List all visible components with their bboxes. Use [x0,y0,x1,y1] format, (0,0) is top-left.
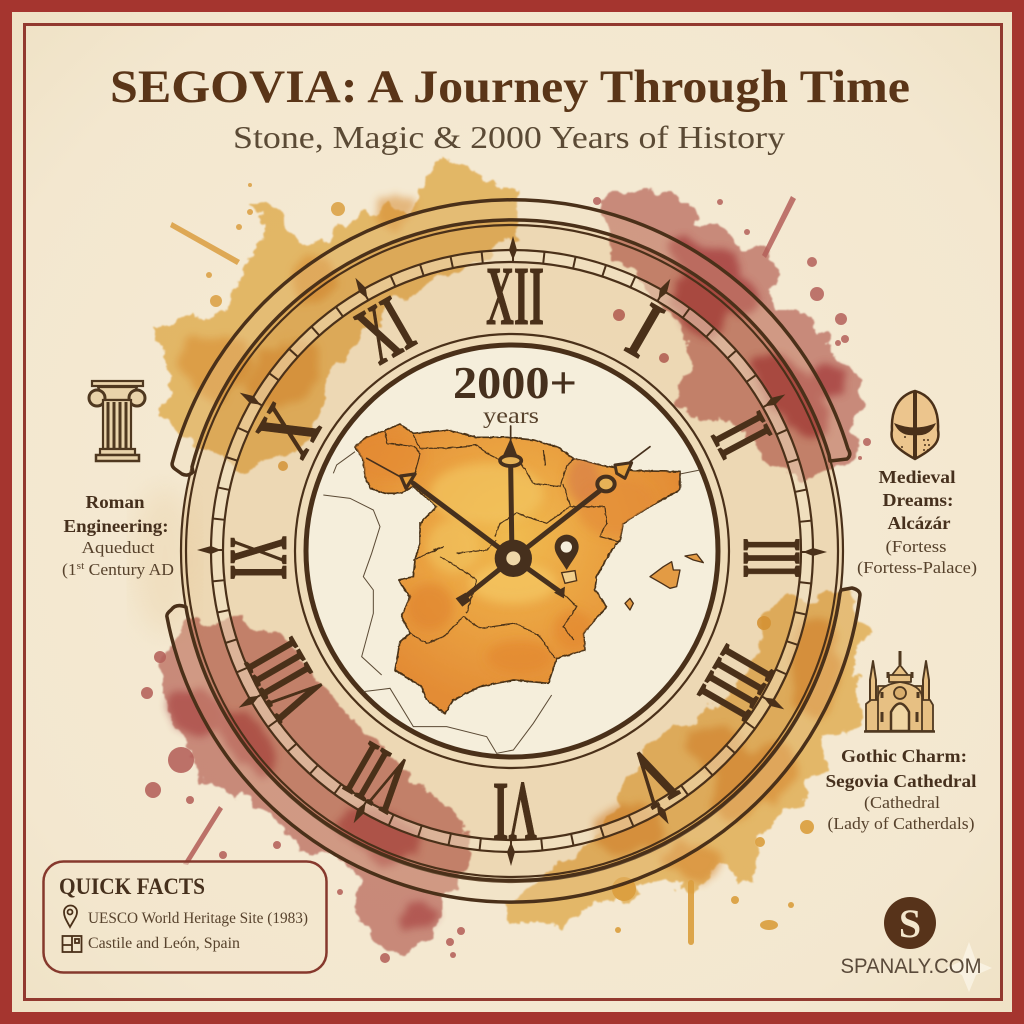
label: Roman Engineering: Engineering: [64,516,168,536]
label: Roman Engineering: st [77,560,84,572]
label: Gothic Charm: Gothic Charm: [841,746,967,766]
roman numerals: XII [486,250,544,343]
clock face [295,334,729,768]
title: SEGOVIA: A Journey Through Time [110,61,910,113]
label: Roman Engineering: Century AD [84,560,174,579]
logo: Spanaly: S [899,901,921,946]
minute track [211,250,813,852]
faint wash beside dial [133,485,197,635]
label: Medieval Dreams: Alcázár [888,513,951,533]
roman numerals: I [613,285,677,376]
label: Medieval Dreams [857,467,977,577]
label: Roman Engineering: Roman [86,492,144,512]
label: Roman Engineering: Aqueduct [82,538,155,557]
Balearic islands [625,554,703,610]
icon: gothic cathedral [864,651,935,732]
hour diamonds [197,236,827,866]
subtitle: Stone, Magic & 2000 Years of History [233,119,785,155]
quick facts heading: QUICK FACTS [59,874,205,899]
dial tinted ring [181,220,843,882]
roman numerals: VII [332,724,425,831]
Spain landmass [355,424,680,713]
S badge [884,897,936,949]
clock dial [167,200,860,902]
roman numerals: XI [342,279,428,382]
label: Gothic Charm: (Lady of Catherdals) [828,814,974,833]
neighbouring borders [323,452,700,753]
brand name: SPANALY.COM [840,955,982,978]
map colour wash [350,433,657,673]
roman numerals [212,250,818,858]
watercolor splash: crimson bottom left [141,620,470,963]
watercolor splash: golden bottom right [500,593,867,945]
roman numerals: IIII [680,633,791,733]
label: Roman Engineering [62,492,174,579]
upper bezel arc [172,200,850,475]
icon: pin outline [64,906,77,927]
label: Medieval Dreams: (Fortess-Palace) [857,558,977,577]
watercolor splash: golden top left [153,158,520,471]
label: Medieval Dreams: Medieval [878,467,956,487]
roman numerals: VI [493,765,537,858]
icon: knight helmet [891,391,939,459]
location pin [555,535,579,583]
label: Gothic Charm: (Cathedral [864,793,940,812]
roman numerals: X [238,390,339,471]
outer double ring [181,220,843,882]
roman numerals: III [725,538,818,578]
2000+ years stat: years [483,403,539,428]
watercolor splash: crimson top right [593,188,871,482]
map of Spain [323,424,703,753]
fact: heritage site: UESCO World Heritage Site (1983) [88,910,308,927]
roman numerals: II [693,400,790,470]
panel: quick facts [44,862,326,972]
lower bezel arc [167,588,860,902]
label: Medieval Dreams: (Fortess [886,537,946,556]
fact: location: Castile and León, Spain [88,935,240,952]
label: Medieval Dreams: Dreams: [882,490,954,510]
roman numerals: IX [212,536,305,580]
roman numerals: VIII [227,625,344,734]
label: Gothic Charm: Segovia Cathedral [826,771,976,791]
icon: map [62,936,82,952]
region borders [385,432,620,658]
logo: Spanaly [840,897,992,992]
icon: roman column [89,381,145,461]
2000+ years stat: 2000+ [453,358,577,408]
roman numerals: V [615,729,691,826]
2000+ years stat [453,358,577,428]
sparkle [946,942,992,992]
clock hands [367,426,650,607]
label: Roman Engineering: (1 [62,560,76,579]
label: Gothic Charm [826,746,976,833]
